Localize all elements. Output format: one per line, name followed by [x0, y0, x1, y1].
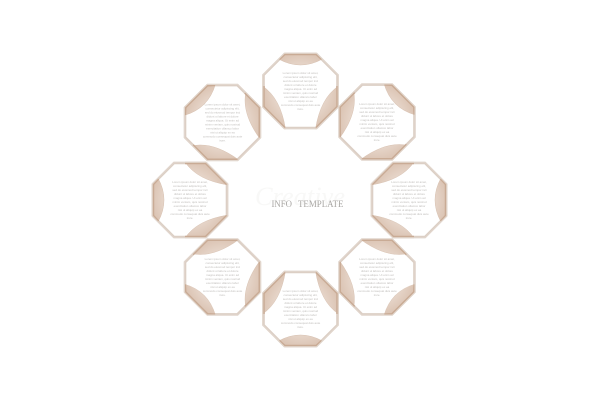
panel: right octagon: minim veniam, quis nostrud — [391, 200, 427, 204]
panel: bottom octagon: Lorem ipsum dolor sit amet, — [283, 289, 319, 293]
panel: bottom-right octagon: irure. — [374, 293, 380, 297]
panel: left octagon: nisi ut aliquip ex ea — [178, 208, 203, 212]
panel: top octagon: sed do eiusmod tempor inci — [283, 79, 319, 83]
panel: bottom-left octagon: sed do eiusmod tempor inci — [205, 265, 241, 269]
panel: bottom octagon: exercitation ullamco labor — [284, 313, 317, 317]
panel: top-right octagon: nisi ut aliquip ex ea — [365, 130, 390, 134]
panel: bottom octagon: commodo consequat duis aute — [281, 321, 321, 325]
panel: top-right octagon: consectetur adipiscing elit, — [360, 106, 394, 110]
panel: left octagon: minim veniam, quis nostrud — [172, 200, 208, 204]
panel: bottom-right octagon: magna aliqua. Ut enim ad — [361, 273, 394, 277]
panel: bottom-left octagon — [169, 223, 276, 331]
panel: bottom-right octagon — [323, 223, 431, 331]
panel: top-right octagon: didunt ut labore et dolore — [361, 114, 393, 118]
panel: top-left octagon: irure. — [219, 138, 226, 142]
panel: bottom octagon — [262, 271, 338, 347]
panel: top-right octagon: Lorem ipsum dolor sit amet, — [359, 102, 395, 106]
panel: bottom-right octagon: minim veniam, quis nostrud — [359, 277, 395, 281]
panel: top-left octagon: Lorem ipsum dolor sit amet, — [205, 102, 241, 106]
panel: left octagon: Lorem ipsum dolor sit amet, — [172, 180, 208, 184]
panel: left octagon — [152, 162, 228, 238]
panel: bottom-left octagon: commodo consequat duis aute — [203, 289, 243, 293]
panel: left octagon: commodo consequat duis aute — [170, 212, 210, 216]
panel: bottom-left octagon: magna aliqua. Ut enim ad — [206, 273, 239, 277]
panel: bottom-right octagon: exercitation ullamco labor — [361, 281, 393, 285]
panel: top octagon: Lorem ipsum dolor sit amet, — [283, 71, 319, 75]
panel: right octagon: magna aliqua. Ut enim ad — [393, 196, 426, 200]
panel: top-left octagon: minim veniam, quis nostrud — [205, 122, 240, 126]
panel: right octagon: sed do eiusmod tempor inci — [391, 188, 427, 192]
panel: bottom-left octagon: irure. — [219, 293, 226, 297]
panel: bottom octagon: magna aliqua. Ut enim ad — [284, 305, 317, 309]
panel: bottom-right octagon: didunt ut labore et dolore — [361, 269, 393, 273]
panel: top-right octagon: commodo consequat duis aute — [357, 134, 397, 138]
panel: right octagon: didunt ut labore et dolore — [393, 192, 425, 196]
panel: top octagon: consectetur adipiscing elit, — [284, 75, 318, 79]
panel: top-right octagon: minim veniam, quis nostrud — [359, 122, 395, 126]
panel: right octagon: commodo consequat duis aute — [389, 212, 429, 216]
panel: bottom-left octagon: minim veniam, quis nostrud — [205, 277, 240, 281]
panel: bottom octagon: didunt ut labore et dolore — [285, 301, 317, 305]
panel: right octagon: nisi ut aliquip ex ea — [397, 208, 422, 212]
panel: top-right octagon: magna aliqua. Ut enim ad — [361, 118, 394, 122]
panel: top-left octagon: exercitation ullamco labor — [206, 126, 239, 130]
panel: bottom octagon: sed do eiusmod tempor inci — [283, 297, 319, 301]
panel: top-left octagon — [169, 69, 276, 176]
panel: right octagon: exercitation ullamco labor — [393, 204, 425, 208]
panel: left octagon: sed do eiusmod tempor inci — [172, 188, 208, 192]
panel: bottom-left octagon: didunt ut labore et dolore — [207, 269, 239, 273]
panel: bottom-left octagon: nisi ut aliquip ex ea — [210, 285, 235, 289]
panel: top octagon: minim veniam, quis nostrud — [283, 91, 318, 95]
panel: bottom-left octagon: consectetur adipiscing elit, — [206, 261, 240, 265]
title: ghost script word: Creative — [255, 182, 345, 211]
panel: bottom-right octagon: consectetur adipiscing elit, — [360, 261, 394, 265]
panel: bottom-left octagon: exercitation ullamco labor — [206, 281, 239, 285]
panel: left octagon: magna aliqua. Ut enim ad — [174, 196, 207, 200]
panel: top octagon: commodo consequat duis aute — [281, 103, 321, 107]
panel: left octagon: exercitation ullamco labor — [174, 204, 206, 208]
panel: top-left octagon: sed do eiusmod tempor inci — [205, 110, 241, 114]
title: TEMPLATE — [298, 200, 344, 210]
panel: bottom octagon: minim veniam, quis nostrud — [283, 309, 318, 313]
panel: left octagon: consectetur adipiscing elit, — [173, 184, 207, 188]
panel: top-right octagon — [323, 68, 431, 176]
panel: top octagon: didunt ut labore et dolore — [285, 83, 317, 87]
panel: bottom-right octagon: Lorem ipsum dolor sit amet, — [359, 257, 395, 261]
panel: bottom octagon: irure. — [297, 325, 304, 329]
panel: top-left octagon: nisi ut aliquip ex ea — [210, 130, 235, 134]
panel: top-left octagon: didunt ut labore et dolore — [207, 114, 239, 118]
panel: right octagon — [371, 162, 447, 238]
panel: bottom octagon: nisi ut aliquip ex ea — [288, 317, 313, 321]
panel: right octagon: consectetur adipiscing elit, — [392, 184, 426, 188]
panel: bottom-left octagon: Lorem ipsum dolor sit amet, — [205, 257, 241, 261]
panel: bottom-right octagon: commodo consequat duis aute — [357, 289, 397, 293]
panel: top octagon: irure. — [297, 107, 304, 111]
panel: top-right octagon: irure. — [374, 138, 380, 142]
title: INFO — [272, 200, 292, 210]
panel: top octagon — [262, 53, 338, 129]
panel: bottom-right octagon: sed do eiusmod tempor inci — [359, 265, 395, 269]
panel: bottom octagon: consectetur adipiscing elit, — [284, 293, 318, 297]
panel: right octagon: irure. — [406, 216, 412, 220]
panel: top octagon: magna aliqua. Ut enim ad — [284, 87, 317, 91]
panel: right octagon: Lorem ipsum dolor sit amet, — [391, 180, 427, 184]
panel: top octagon: nisi ut aliquip ex ea — [288, 99, 313, 103]
panel: top-right octagon: exercitation ullamco labor — [361, 126, 393, 130]
panel: top-left octagon: commodo consequat duis aute — [203, 134, 243, 138]
panel: top-right octagon: sed do eiusmod tempor inci — [359, 110, 395, 114]
panel: bottom-right octagon: nisi ut aliquip ex ea — [365, 285, 390, 289]
title — [272, 200, 344, 210]
panel: left octagon: irure. — [187, 216, 193, 220]
panel: left octagon: didunt ut labore et dolore — [174, 192, 206, 196]
panel: top octagon: exercitation ullamco labor — [284, 95, 317, 99]
panel: top-left octagon: magna aliqua. Ut enim ad — [206, 118, 239, 122]
panel: top-left octagon: consectetur adipiscing elit, — [206, 106, 240, 110]
